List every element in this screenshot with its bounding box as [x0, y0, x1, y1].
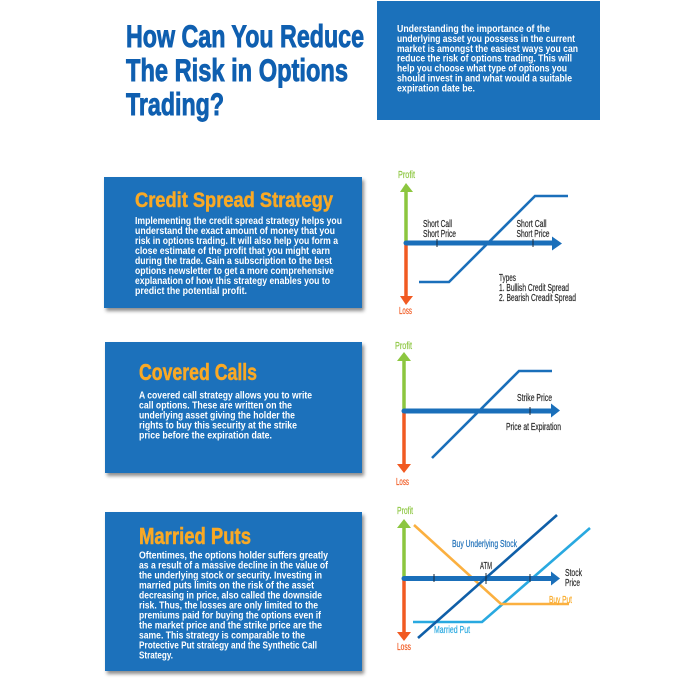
- intro text: expiration date be.: [397, 84, 475, 94]
- credit spread text: risk in options trading. It will also help you form a: [135, 236, 338, 247]
- chart: covered call payoff: [395, 341, 561, 488]
- chart: married put payoff: Married Put: [434, 625, 470, 636]
- chart: credit spread payoff: 2. Bearish Creadit Spread: [499, 293, 576, 304]
- credit spread text: Implementing the credit spread strategy helps you: [135, 216, 342, 227]
- married puts text: Strategy.: [139, 650, 173, 662]
- chart: covered call payoff: Loss: [396, 477, 409, 488]
- intro text: [397, 24, 578, 94]
- chart: credit spread payoff: Short Price: [423, 229, 456, 240]
- married puts text: risk. Thus, the losses are only limited to the: [139, 600, 318, 612]
- title: Trading?: [126, 86, 224, 122]
- credit spread text: [135, 216, 342, 297]
- heading: married puts: Married Puts: [139, 523, 251, 549]
- credit spread text: predict the potential profit.: [135, 286, 247, 297]
- chart: credit spread payoff: Short Call: [516, 219, 546, 230]
- chart: married put payoff: Buy Underlying Stock: [452, 539, 518, 550]
- married puts text: married puts limits on the risk of the asset: [139, 580, 315, 592]
- heading: covered calls: Covered Calls: [139, 359, 257, 385]
- intro text: market is amongst the easiest ways you can: [397, 44, 578, 55]
- married puts text: decreasing in price, also called the downside: [139, 590, 322, 602]
- covered calls text: call options. These are written on the: [139, 400, 292, 412]
- credit spread text: options newsletter to get a more comprehensive: [135, 266, 334, 277]
- chart: credit spread payoff: Short Price: [516, 229, 550, 240]
- panel: married puts: [105, 512, 362, 671]
- chart: covered call payoff: Strike Price: [517, 393, 552, 404]
- intro text: underlying asset you possess in the current: [397, 34, 576, 45]
- heading: credit spread strategy: Credit Spread Strategy: [135, 188, 333, 212]
- chart: credit spread payoff: Short Call: [423, 219, 452, 230]
- married puts text: the underlying stock or security. Investing in: [139, 570, 322, 582]
- chart: married put payoff: Profit: [397, 506, 413, 517]
- intro text: reduce the risk of options trading. This will: [397, 54, 572, 64]
- credit spread text: close estimate of the profit that you might earn: [135, 246, 330, 257]
- covered calls text: underlying asset giving the holder the: [139, 410, 295, 422]
- panel: credit spread strategy: [104, 177, 362, 308]
- title: How Can You Reduce: [126, 18, 364, 54]
- intro text: should invest in and what would a suitable: [397, 74, 572, 84]
- title: The Risk in Options: [126, 52, 348, 88]
- chart: credit spread payoff: Types: [499, 273, 516, 284]
- credit spread text: explanation of how this strategy enables you to: [135, 276, 330, 287]
- intro text: help you choose what type of options you: [397, 64, 567, 74]
- chart: credit spread payoff: Loss: [399, 306, 412, 317]
- panel: covered calls: [105, 342, 362, 473]
- married puts text: the market price and the strike price are the: [139, 620, 322, 632]
- credit spread text: during the trade. Gain a subscription to the best: [135, 256, 333, 267]
- covered calls text: rights to buy this security at the strike: [139, 420, 297, 432]
- title: [126, 18, 364, 122]
- covered calls text: [139, 390, 312, 442]
- married puts text: Protective Put strategy and the Synthetic Call: [139, 640, 317, 652]
- chart: married put payoff: Stock: [565, 568, 583, 579]
- married puts text: Oftentimes, the options holder suffers greatly: [139, 550, 328, 562]
- chart: married put payoff: Buy Put: [549, 595, 572, 606]
- chart: married put payoff: ATM: [480, 561, 492, 572]
- covered calls text: price before the expiration date.: [139, 430, 272, 442]
- chart: married put payoff: Price: [565, 578, 580, 589]
- married puts text: same. This strategy is comparable to the: [139, 630, 305, 642]
- chart: married put payoff: [397, 506, 590, 653]
- married puts text: as a result of a massive decline in the value of: [139, 560, 329, 572]
- married puts text: [139, 550, 329, 662]
- panel: introduction: [377, 1, 600, 120]
- married puts text: premiums paid for buying the options even if: [139, 610, 322, 622]
- credit spread text: understand the exact amount of money that you: [135, 226, 335, 237]
- chart: covered call payoff: Price at Expiration: [506, 422, 561, 433]
- chart: covered call payoff: Profit: [395, 341, 412, 352]
- chart: credit spread payoff: [398, 170, 576, 317]
- chart: credit spread payoff: Profit: [398, 170, 415, 181]
- chart: married put payoff: Loss: [397, 642, 411, 653]
- covered calls text: A covered call strategy allows you to write: [139, 390, 312, 402]
- intro text: Understanding the importance of the: [397, 24, 550, 35]
- chart: credit spread payoff: 1. Bullish Credit Spread: [499, 283, 569, 294]
